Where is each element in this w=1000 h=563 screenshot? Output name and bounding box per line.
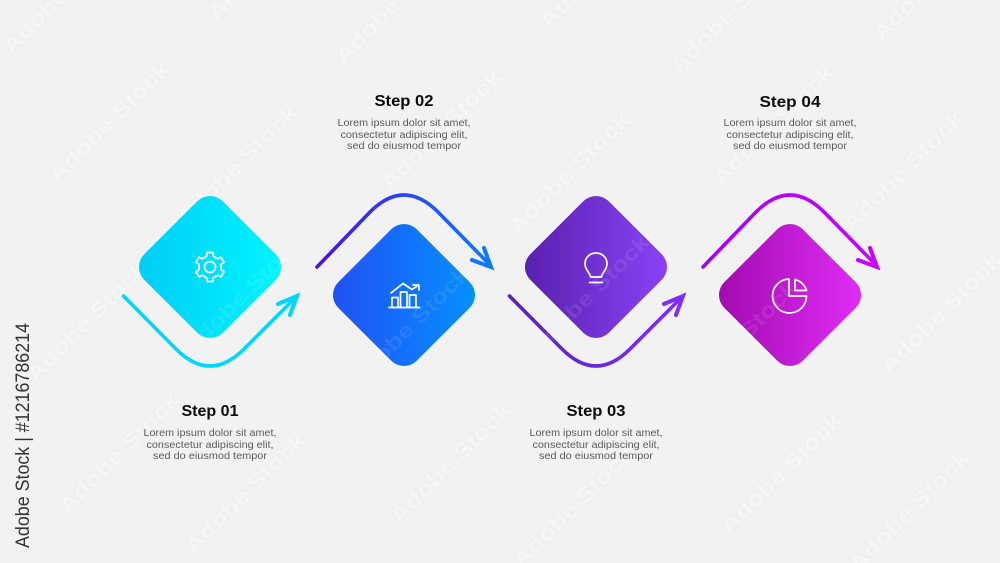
step 04 text: sed do eiusmod tempor <box>733 140 848 152</box>
watermarks: Adobe Stock <box>709 60 838 190</box>
step 02 diamond <box>326 217 482 373</box>
step 04 text: Step 04 <box>760 94 821 111</box>
step 03 text: sed do eiusmod tempor <box>539 450 654 462</box>
step 01 text: sed do eiusmod tempor <box>153 450 268 462</box>
icon: growth chart <box>389 284 420 308</box>
watermarks: Adobe Stock <box>505 108 634 238</box>
step 01 text: Step 01 <box>182 403 239 420</box>
watermarks: Adobe Stock <box>377 65 506 195</box>
step 04 diamond <box>712 217 868 373</box>
step 03 text <box>530 403 662 462</box>
step 02 text <box>338 93 470 152</box>
step 01 text: consectetur adipiscing elit, <box>146 439 274 451</box>
icon: light bulb <box>585 253 607 282</box>
step 03 diamond <box>518 189 674 345</box>
step 04 text: Lorem ipsum dolor sit amet, <box>724 117 856 129</box>
stock id label: Adobe Stock | #1216786214 <box>13 323 34 548</box>
watermarks: Adobe Stock <box>717 408 846 538</box>
arrow: step 02 <box>317 195 491 267</box>
faint watermarks over diamonds <box>179 230 802 406</box>
step 01 text <box>144 403 276 462</box>
arrow: step 01 <box>124 296 297 366</box>
faint watermarks over diamonds: Adobe Stock <box>525 230 654 360</box>
step 02 text: Lorem ipsum dolor sit amet, <box>338 117 470 129</box>
faint watermarks over diamonds: Adobe Stock <box>179 230 308 360</box>
icon: pie chart <box>772 279 806 313</box>
watermarks: Adobe Stock <box>173 100 302 230</box>
arrow: step 04 <box>703 195 877 267</box>
arrow: step 03 <box>510 296 683 366</box>
watermarks: Adobe Stock <box>877 248 1000 378</box>
watermarks: Adobe Stock <box>181 428 310 558</box>
step 02 text: consectetur adipiscing elit, <box>340 129 468 141</box>
icon: gear <box>195 252 225 282</box>
watermarks: Adobe Stock <box>23 256 152 386</box>
step 03 text: consectetur adipiscing elit, <box>532 439 660 451</box>
faint watermarks over diamonds: Adobe Stock <box>673 276 802 406</box>
step 03 text: Lorem ipsum dolor sit amet, <box>530 427 662 439</box>
step 01 diamond <box>132 189 288 345</box>
step 04 text <box>724 94 856 152</box>
step 04 text: consectetur adipiscing elit, <box>726 129 854 141</box>
watermarks: Adobe Stock <box>839 106 968 236</box>
faint watermarks over diamonds: Adobe Stock <box>345 262 474 392</box>
watermarks: Adobe Stock <box>387 398 516 528</box>
step 03 text: Step 03 <box>566 403 626 420</box>
watermarks: Adobe Stock <box>45 57 174 187</box>
step 02 text: sed do eiusmod tempor <box>347 140 462 152</box>
step 02 text: Step 02 <box>374 93 434 110</box>
step 01 text: Lorem ipsum dolor sit amet, <box>144 427 276 439</box>
watermarks: Adobe Stock <box>55 388 184 518</box>
